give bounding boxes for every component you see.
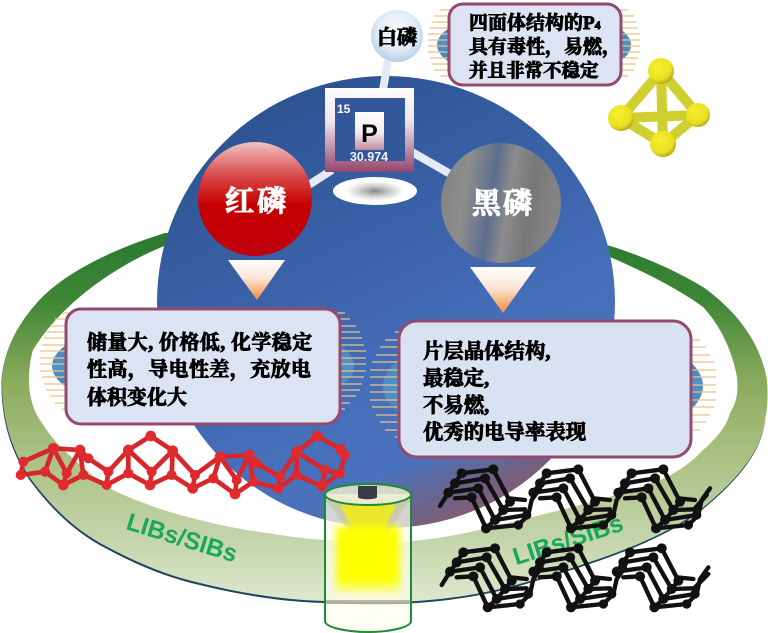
text: black phosphorus description: 不易燃, (423, 394, 489, 417)
black phosphorus layered molecule, upper (440, 464, 710, 533)
blue sphere (157, 76, 615, 528)
text: red phosphorus description (87, 331, 313, 409)
element tile: phosphorus: 30.974 (350, 150, 388, 164)
arrow: black phosphorus down (470, 267, 536, 313)
label: LIBs/SIBs right: LIBs/SIBs (510, 510, 627, 571)
text: black phosphorus description: 优秀的电导率表现 (423, 420, 586, 444)
arrow: red phosphorus down (228, 260, 285, 300)
black phosphorus circle (441, 143, 561, 263)
text: white phosphorus description: 并且非常不稳定 (469, 60, 599, 82)
label: white phosphorus: 白磷 (377, 26, 417, 49)
text: white phosphorus description: 四面体结构的P4 (469, 12, 601, 34)
icon: P4 tetrahedron (608, 58, 710, 157)
element tile: phosphorus (325, 88, 414, 172)
panel: red phosphorus properties (40, 309, 366, 424)
element tile: phosphorus: 15 (337, 102, 351, 116)
battery cylinder (325, 484, 411, 632)
oval shadow (333, 177, 417, 205)
icon: white phosphorus circle (371, 10, 423, 62)
text: white phosphorus description (469, 12, 621, 82)
text: black phosphorus description: 片层晶体结构, (423, 340, 550, 363)
text: red phosphorus description: 性高，导电性差，充放电 (87, 357, 311, 381)
battery terminal (358, 486, 377, 499)
text: white phosphorus description: 具有毒性，易燃， (469, 36, 621, 58)
label: black phosphorus: 黑磷 (472, 187, 534, 220)
green ring (2, 233, 768, 604)
red phosphorus circle (198, 142, 312, 256)
label: red phosphorus: 红磷 (225, 185, 289, 218)
element tile: phosphorus: P (361, 120, 378, 148)
text: black phosphorus description: 最稳定, (423, 367, 489, 390)
black phosphorus layered molecule, lower (442, 543, 708, 612)
panel: white phosphorus properties (428, 4, 640, 85)
text: red phosphorus description: 体积变化大 (87, 385, 187, 409)
red phosphorus chain molecule (16, 431, 350, 499)
label: LIBs/SIBs left: LIBs/SIBs (123, 509, 240, 568)
text: red phosphorus description: 储量大, 价格低, 化学稳定 (87, 331, 313, 354)
connector lines (304, 60, 452, 188)
text: black phosphorus description (423, 340, 586, 444)
panel: black phosphorus properties (370, 321, 716, 457)
